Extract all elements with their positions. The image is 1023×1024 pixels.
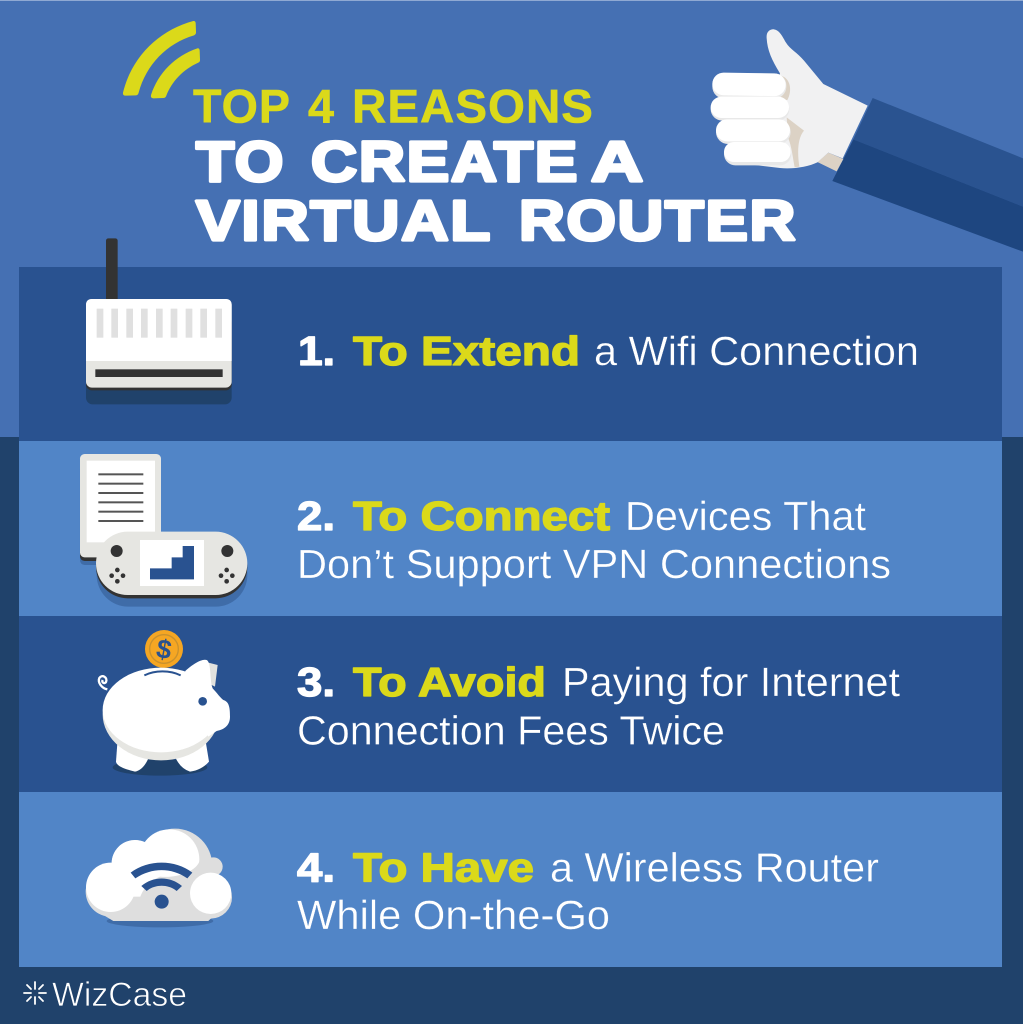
icon: piggy bank with coin [99,630,230,776]
panel: reason 1 [19,267,1002,441]
logo wordmark: WizCase [52,976,187,1014]
reason 3 text: 3. [297,659,335,705]
reason 1 text: 1. [298,328,335,374]
reason 3 text: To Avoid [353,659,546,705]
title: VIRTUAL [196,189,492,253]
title: CREATE [311,130,579,194]
icon: thumbs up hand [711,29,1023,252]
reason 1 text [298,328,919,374]
icon: e-reader and game console [80,454,247,607]
title: ROUTER [519,189,797,253]
title: TOP [193,80,291,132]
title: 4 [308,80,335,132]
panel: reason 3 [19,616,1002,792]
icon: wifi arcs [123,21,200,98]
reason 2 text: Don’t Support VPN Connections [297,541,891,587]
panel: reason 4 [19,792,1002,967]
reason 4 text: While On-the-Go [297,892,610,938]
reason 2 text [297,493,891,587]
reason 1 text: To Extend [353,328,580,374]
reason 3 text: Paying for Internet [562,659,901,705]
reason 4 text [297,844,879,938]
reason 2 text: Devices That [625,493,867,539]
reason 2 text: 2. [297,493,335,539]
title: A [591,130,645,194]
reason 1 text: a Wifi Connection [594,328,919,374]
reason 3 text [297,659,901,754]
icon: logo asterisk [24,982,46,1004]
reason 2 text: To Connect [353,493,610,539]
reason 4 text: To Have [353,844,534,890]
title: TO [196,130,285,194]
reason 4 text: a Wireless Router [550,844,879,890]
reason 3 text: Connection Fees Twice [297,708,725,754]
icon: router [86,238,232,404]
icon: piggy bank with coin: $ [154,633,174,665]
reason 4 text: 4. [297,844,335,890]
logo: WizCase [24,976,187,1014]
title [193,80,797,253]
title: REASONS [352,80,594,132]
panel: reason 2 [19,441,1002,616]
icon: wifi cloud [86,829,232,927]
